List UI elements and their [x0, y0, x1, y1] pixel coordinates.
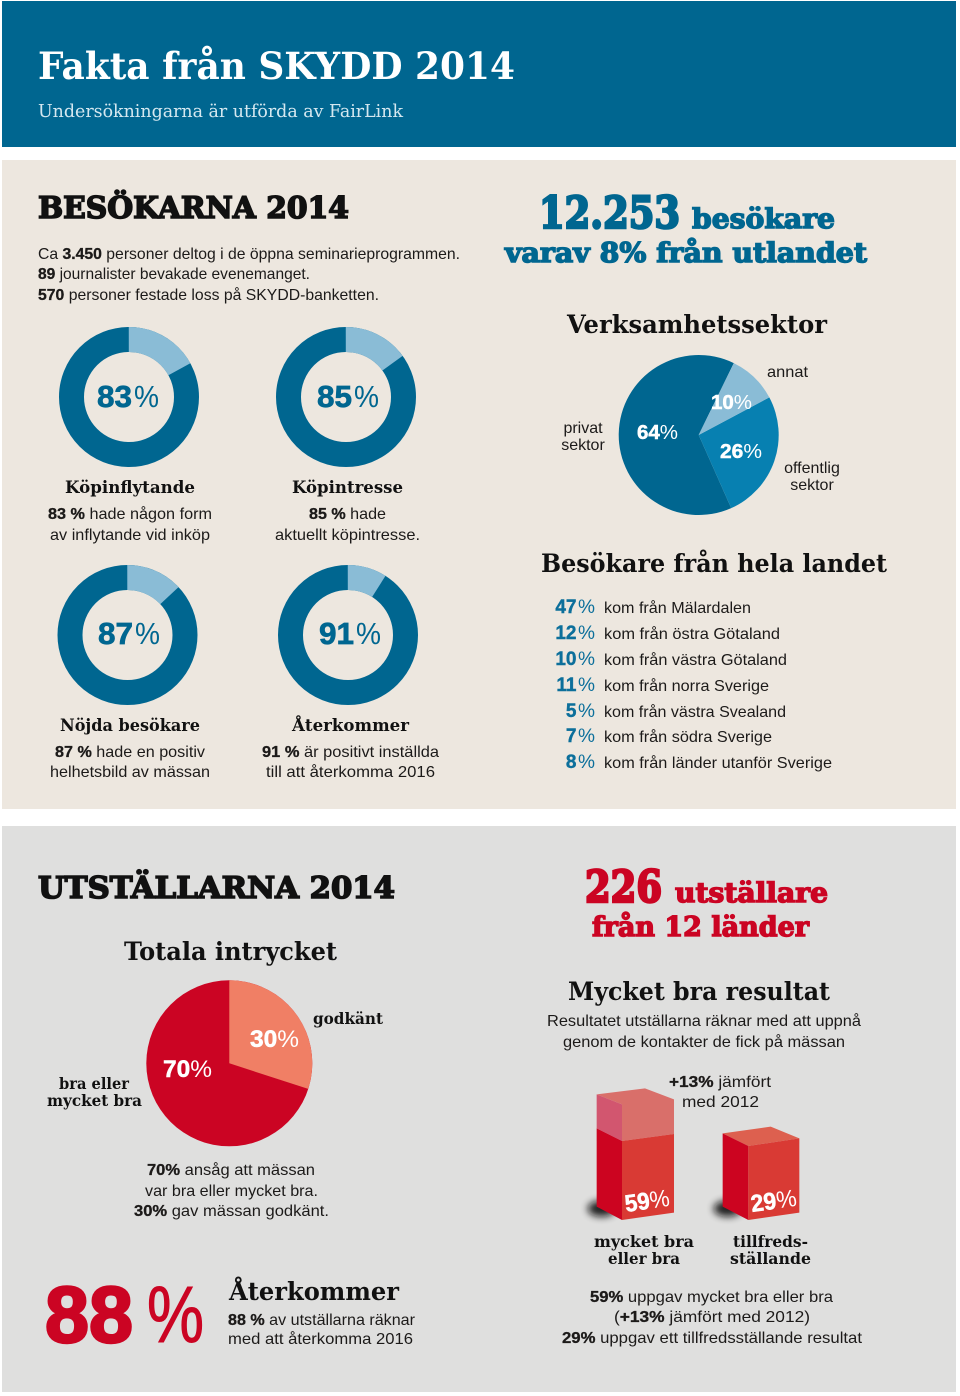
- intro text: [38, 246, 460, 304]
- text: återkommer: 91 % är positivt inställda: [262, 744, 439, 761]
- pie chart: verksamhetssektor: annat: [767, 364, 809, 381]
- text: totala intrycket: 30% gav mässan godkänt.: [134, 1203, 329, 1220]
- text: köpinflytande: 83 % hade någon form: [48, 505, 212, 523]
- pie chart: verksamhetssektor: sektor: [790, 477, 834, 494]
- text: återkommer: till att återkomma 2016: [266, 763, 435, 781]
- big stat: 88%: [45, 1270, 204, 1359]
- text: köpinflytande: Köpinflytande: [65, 478, 195, 498]
- donut: nöjda besökare 87%: %: [135, 616, 160, 651]
- headline: 226 utställare: [585, 862, 828, 943]
- heading: besökare från hela landet: Besökare från hela landet: [541, 549, 887, 578]
- text: köpintresse: 85 % hade: [309, 506, 386, 523]
- text: köpintresse: Köpintresse: [292, 478, 403, 498]
- text: resultat summary: 29% uppgav ett tillfredsställande resultat: [562, 1330, 863, 1347]
- list: besökare per region: 5: [566, 701, 577, 722]
- heading: besökarna 2014: BESÖKARNA 2014: [38, 189, 349, 226]
- text: resultat summary: 59% uppgav mycket bra eller bra: [590, 1289, 833, 1306]
- text: resultat summary: (+13% jämfört med 2012): [614, 1309, 810, 1326]
- headline: 226 utställare: från 12 länder: [592, 910, 810, 943]
- bar: mycket bra eller bra 59%: [588, 1088, 674, 1220]
- headline: 226 utställare: utställare: [675, 878, 828, 909]
- donut: återkommer 91%: 91: [319, 616, 354, 651]
- text: totala intrycket: [134, 1161, 329, 1220]
- pie chart: totala intrycket: 70%: [163, 1056, 212, 1083]
- heading: verksamhetssektor: Verksamhetssektor: [566, 310, 828, 339]
- list: besökare per region: 47: [555, 597, 576, 618]
- headline: 12.253 besökare: 12.253: [539, 188, 680, 239]
- list: besökare per region: 12: [555, 623, 576, 644]
- header banner: [2, 1, 956, 147]
- pie chart: verksamhetssektor: offentlig: [784, 460, 840, 477]
- headline: 226 utställare: 226: [585, 862, 662, 913]
- heading: utställarna 2014: UTSTÄLLARNA 2014: [38, 869, 395, 906]
- donut: återkommer 91%: [290, 578, 406, 692]
- list: besökare per region: 7: [566, 726, 576, 747]
- text: köpinflytande: [48, 478, 212, 544]
- panel: besökarna: [2, 160, 956, 809]
- list: besökare per region: kom från västra Svealand: [604, 703, 786, 721]
- donut: nöjda besökare 87%: 87: [98, 616, 133, 651]
- intro text: 89 journalister bevakade evenemanget.: [38, 266, 310, 283]
- text: återkommer: [262, 714, 439, 781]
- bar labels: ställande: [730, 1249, 811, 1268]
- callout: +13% jämfört med 2012: [669, 1074, 772, 1111]
- callout: +13% jämfört med 2012: +13% jämfört: [669, 1074, 772, 1091]
- donut: köpinflytande 83%: [72, 340, 186, 454]
- text: återkommer 2016: med att återkomma 2016: [228, 1330, 413, 1348]
- text: nöjda besökare: Nöjda besökare: [60, 716, 200, 736]
- pie chart: totala intrycket: mycket bra: [47, 1091, 142, 1110]
- headline: 12.253 besökare: [504, 188, 868, 269]
- text: återkommer: Återkommer: [291, 714, 410, 736]
- pie chart: verksamhetssektor: privat: [563, 420, 603, 437]
- headline: 12.253 besökare: varav 8% från utlandet: [504, 236, 868, 269]
- intro text: 570 personer festade loss på SKYDD-banketten.: [38, 286, 379, 304]
- text: nöjda besökare: helhetsbild av mässan: [50, 764, 210, 781]
- pie chart: verksamhetssektor: [561, 355, 840, 515]
- bar: tillfredsställande 29%: [714, 1127, 799, 1220]
- donut: köpinflytande 83%: %: [134, 379, 159, 414]
- big stat: 88%: %: [147, 1270, 204, 1359]
- text: mycket bra resultat: [547, 977, 861, 1051]
- list: besökare per region: kom från västra Götaland: [604, 651, 787, 669]
- list: besökare per region: %: [578, 726, 595, 747]
- subtitle: Undersökningarna är utförda av FairLink: [38, 101, 404, 122]
- donut: nöjda besökare 87%: [70, 578, 185, 692]
- title: Fakta från SKYDD 2014: [38, 44, 515, 88]
- list: besökare per region: %: [578, 752, 595, 773]
- list: besökare per region: 8: [566, 752, 576, 773]
- list: besökare per region: kom från Mälardalen: [604, 599, 751, 617]
- text: nöjda besökare: 87 % hade en positiv: [55, 744, 205, 761]
- text: mycket bra resultat: Mycket bra resultat: [568, 977, 830, 1006]
- text: återkommer 2016: [228, 1277, 416, 1348]
- headline: 12.253 besökare: besökare: [692, 204, 835, 235]
- bar labels: mycket bra: [594, 1232, 694, 1251]
- callout: +13% jämfört med 2012: med 2012: [682, 1094, 759, 1111]
- list: besökare per region: kom från södra Sverige: [604, 728, 772, 746]
- text: totala intrycket: var bra eller mycket bra.: [145, 1183, 318, 1200]
- bar labels: eller bra: [608, 1249, 680, 1268]
- big stat: 88%: 88: [45, 1270, 133, 1359]
- list: besökare per region: %: [578, 597, 595, 618]
- text: köpintresse: aktuellt köpintresse.: [275, 527, 420, 544]
- list: besökare per region: kom från östra Götaland: [604, 625, 780, 643]
- donut: återkommer 91%: %: [356, 616, 381, 651]
- text: resultat summary: [562, 1289, 863, 1347]
- list: besökare per region: kom från norra Sverige: [604, 677, 769, 695]
- list: besökare per region: %: [578, 623, 595, 644]
- text: köpintresse: [275, 478, 420, 544]
- list: besökare per region: %: [578, 649, 595, 670]
- panel: utställarna: [2, 826, 956, 1392]
- heading: totala intrycket: Totala intrycket: [124, 937, 337, 966]
- text: totala intrycket: 70% ansåg att mässan: [147, 1161, 315, 1179]
- pie chart: verksamhetssektor: sektor: [561, 437, 605, 454]
- donut: köpintresse 85%: 85: [317, 379, 352, 414]
- bar: tillfredsställande 29%: 29%: [749, 1185, 798, 1218]
- text: mycket bra resultat: genom de kontakter de fick på mässan: [563, 1033, 845, 1051]
- intro text: Ca 3.450 personer deltog i de öppna seminarieprogrammen.: [38, 246, 460, 263]
- text: återkommer 2016: 88 % av utställarna räknar: [228, 1312, 416, 1329]
- pie chart: totala intrycket: godkänt: [313, 1009, 384, 1028]
- pie chart: verksamhetssektor: 64%: [637, 422, 678, 444]
- text: mycket bra resultat: Resultatet utställarna räknar med att uppnå: [547, 1012, 861, 1030]
- pie chart: totala intrycket: [47, 980, 384, 1146]
- list: besökare per region: kom från länder utanför Sverige: [604, 754, 832, 772]
- list: besökare per region: %: [578, 701, 595, 722]
- bar labels: [594, 1232, 811, 1268]
- list: besökare per region: 11: [556, 675, 577, 696]
- donut: köpintresse 85%: %: [354, 379, 379, 414]
- pie chart: totala intrycket: bra eller: [59, 1074, 130, 1093]
- bar: mycket bra eller bra 59%: 59%: [623, 1185, 671, 1218]
- pie chart: verksamhetssektor: 10%: [711, 392, 752, 414]
- pie chart: verksamhetssektor: 26%: [720, 441, 762, 463]
- donut: köpintresse 85%: [288, 340, 404, 454]
- pie chart: totala intrycket: 30%: [250, 1026, 299, 1053]
- bar labels: tillfreds-: [733, 1232, 808, 1251]
- text: nöjda besökare: [50, 716, 210, 781]
- list: besökare per region: [555, 597, 832, 773]
- donut: köpinflytande 83%: 83: [97, 379, 132, 414]
- text: återkommer 2016: Återkommer: [228, 1277, 400, 1306]
- list: besökare per region: %: [578, 675, 595, 696]
- text: köpinflytande: av inflytande vid inköp: [50, 527, 210, 544]
- list: besökare per region: 10: [555, 649, 576, 670]
